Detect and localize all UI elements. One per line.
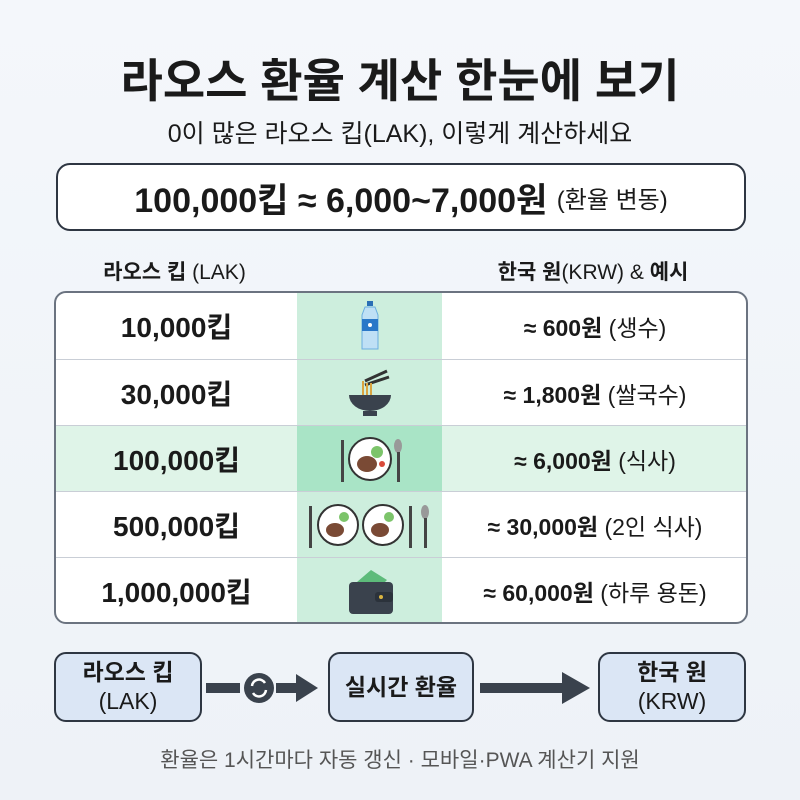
row 5: 1,000,000킵 (101, 577, 252, 608)
row 4: ≈ 30,000원 (2인 식사) (488, 514, 702, 540)
flow box: LAK: 라오스 킵 (82, 659, 174, 685)
row 3 highlighted (56, 425, 748, 491)
column header: KRW: 한국 원(KRW) & 예시 (498, 261, 688, 284)
table (54, 291, 748, 624)
row 2 (56, 359, 748, 425)
summary box: (환율 변동) (557, 186, 668, 214)
arrow with refresh icon (206, 673, 318, 703)
arrow (480, 672, 590, 704)
flow box: KRW (598, 652, 746, 722)
row 5: ≈ 60,000원 (하루 용돈) (483, 580, 707, 606)
row 4: 500,000킵 (113, 511, 240, 542)
row 5 (56, 557, 748, 623)
flow box: KRW: 한국 원 (637, 659, 707, 685)
row 3 highlighted: 100,000킵 (113, 445, 240, 476)
row 2: 30,000킵 (121, 379, 232, 410)
row 1 (121, 293, 666, 359)
row 1: ≈ 600원 (생수) (524, 315, 666, 341)
row 1: 10,000킵 (121, 312, 232, 343)
column header: LAK: 라오스 킵 (LAK) (103, 261, 246, 284)
flow box: realtime: 실시간 환율 (345, 674, 457, 700)
flow box: LAK: (LAK) (99, 688, 157, 714)
summary box (56, 163, 746, 231)
row 4 (56, 491, 748, 557)
flow box: KRW: (KRW) (638, 688, 706, 714)
footer note: 환율은 1시간마다 자동 갱신 · 모바일·PWA 계산기 지원 (160, 749, 640, 772)
flow box: LAK (54, 652, 202, 722)
summary box: 100,000킵 ≈ 6,000~7,000원 (134, 182, 547, 220)
subtitle: 0이 많은 라오스 킵(LAK), 이렇게 계산하세요 (168, 120, 632, 148)
row 3 highlighted: ≈ 6,000원 (식사) (514, 448, 676, 474)
row 2: ≈ 1,800원 (쌀국수) (504, 382, 686, 408)
flow box: realtime (328, 652, 474, 722)
title: 라오스 환율 계산 한눈에 보기 (121, 55, 679, 107)
